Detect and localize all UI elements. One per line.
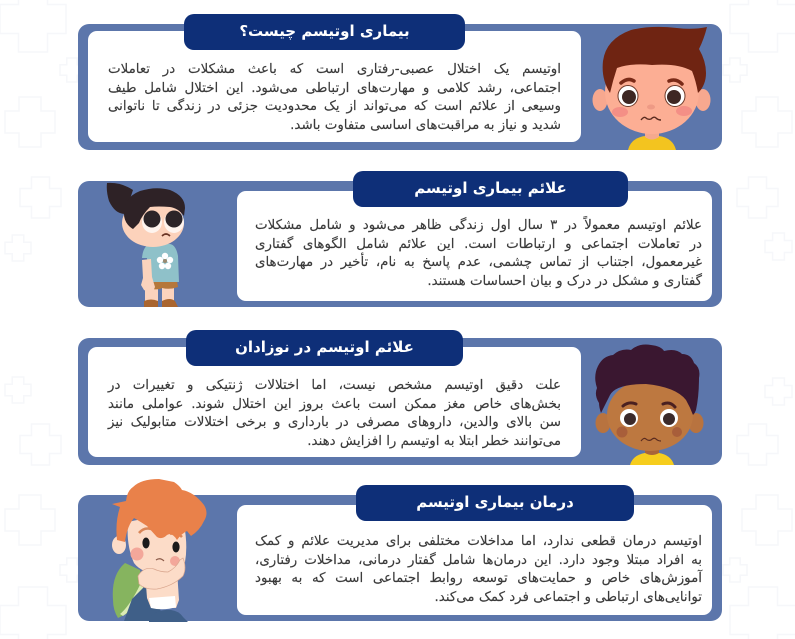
text block: treatment: آموزش‌های خاص و حمایت‌های توسعه روابط اجتماعی است که به بهبود — [255, 571, 702, 586]
text block: treatment: اوتیسم درمان قطعی ندارد، اما مداخلات مختلفی برای مدیریت علائم و کمک — [255, 534, 702, 549]
text block: symptoms in newborns: می‌توانند خطر ابتلا به اوتیسم را افزایش دهند. — [307, 434, 561, 449]
heading: symptoms in newborns: علائم اوتیسم در نوزادان — [235, 338, 414, 356]
text box: what is autism — [88, 31, 581, 142]
text block: symptoms: علائم اوتیسم معمولاً در ۳ سال اول زندگی ظاهر می‌شود و شامل مشکلات — [255, 218, 702, 233]
text block: symptoms: گفتاری و مشکل در درک و بیان احساسات هستند. — [427, 274, 702, 289]
heading: symptoms: علائم بیماری اوتیسم — [414, 179, 567, 197]
text block: symptoms: غیرمعمول، اجتناب از تماس چشمی، عدم پاسخ به نام، تأخیر در مهارت‌های — [255, 255, 702, 270]
text block: symptoms — [255, 216, 702, 289]
icon: sad boy with curly hair — [595, 344, 704, 465]
text block: what is autism: اوتیسم یک اختلال عصبی-رفتاری است که باعث مشکلات در تعاملات — [108, 62, 561, 77]
heading: symptoms — [353, 171, 628, 207]
text block: symptoms in newborns: بخش‌های خاص مغز ممکن است باعث بروز این اختلال شوند. عواملی مانند — [108, 397, 561, 412]
heading: symptoms in newborns — [186, 330, 463, 366]
text block: what is autism: وسیعی از علائم است که می‌تواند از یک محدودیت جزئی در زندگی تا ناتوانی — [108, 99, 561, 114]
panel: symptoms — [78, 181, 722, 307]
text block: treatment: توانایی‌های ارتباطی و اجتماعی فرد کمک می‌کند. — [435, 590, 702, 605]
text block: what is autism — [108, 62, 561, 133]
text block: what is autism: شدید و نیاز به مراقبت‌های اساسی متفاوت باشد. — [290, 118, 561, 133]
panel: treatment — [78, 495, 722, 621]
text block: what is autism: اجتماعی، رشد کلامی و مهارت‌های ارتباطی می‌شود. این اختلال شامل طیف — [108, 81, 561, 96]
icon: sad girl with bun — [106, 182, 185, 307]
text box: symptoms in newborns — [88, 347, 581, 457]
text block: treatment — [255, 534, 703, 605]
text box: treatment — [237, 505, 712, 615]
heading: treatment — [356, 485, 634, 521]
text box: symptoms — [237, 191, 712, 301]
icon: sad boy hugging knees — [112, 479, 206, 622]
text block: symptoms in newborns: علت دقیق اوتیسم مشخص نیست، اما اختلالات ژنتیکی و تغییرات در — [108, 378, 561, 393]
icon: sad boy with brown hair — [592, 26, 710, 150]
heading: what is autism — [184, 14, 465, 50]
heading: treatment: درمان بیماری اوتیسم — [416, 493, 574, 511]
panel: what is autism — [78, 24, 722, 150]
heading: what is autism: بیماری اوتیسم چیست؟ — [239, 22, 410, 40]
panel: symptoms in newborns — [78, 338, 722, 465]
text block: symptoms: در تعاملات اجتماعی و ارتباطات است. این علائم شامل الگوهای گفتاری — [255, 237, 702, 252]
text block: symptoms in newborns: سن بالای والدین، داروهای مصرفی در بارداری و برخی اختلالات متابولیک نیز — [108, 415, 561, 430]
text block: treatment: به افراد مبتلا وجود دارد. این درمان‌ها شامل گفتار درمانی، مداخلات رفتاری، — [255, 553, 702, 568]
text block: symptoms in newborns — [107, 378, 561, 449]
